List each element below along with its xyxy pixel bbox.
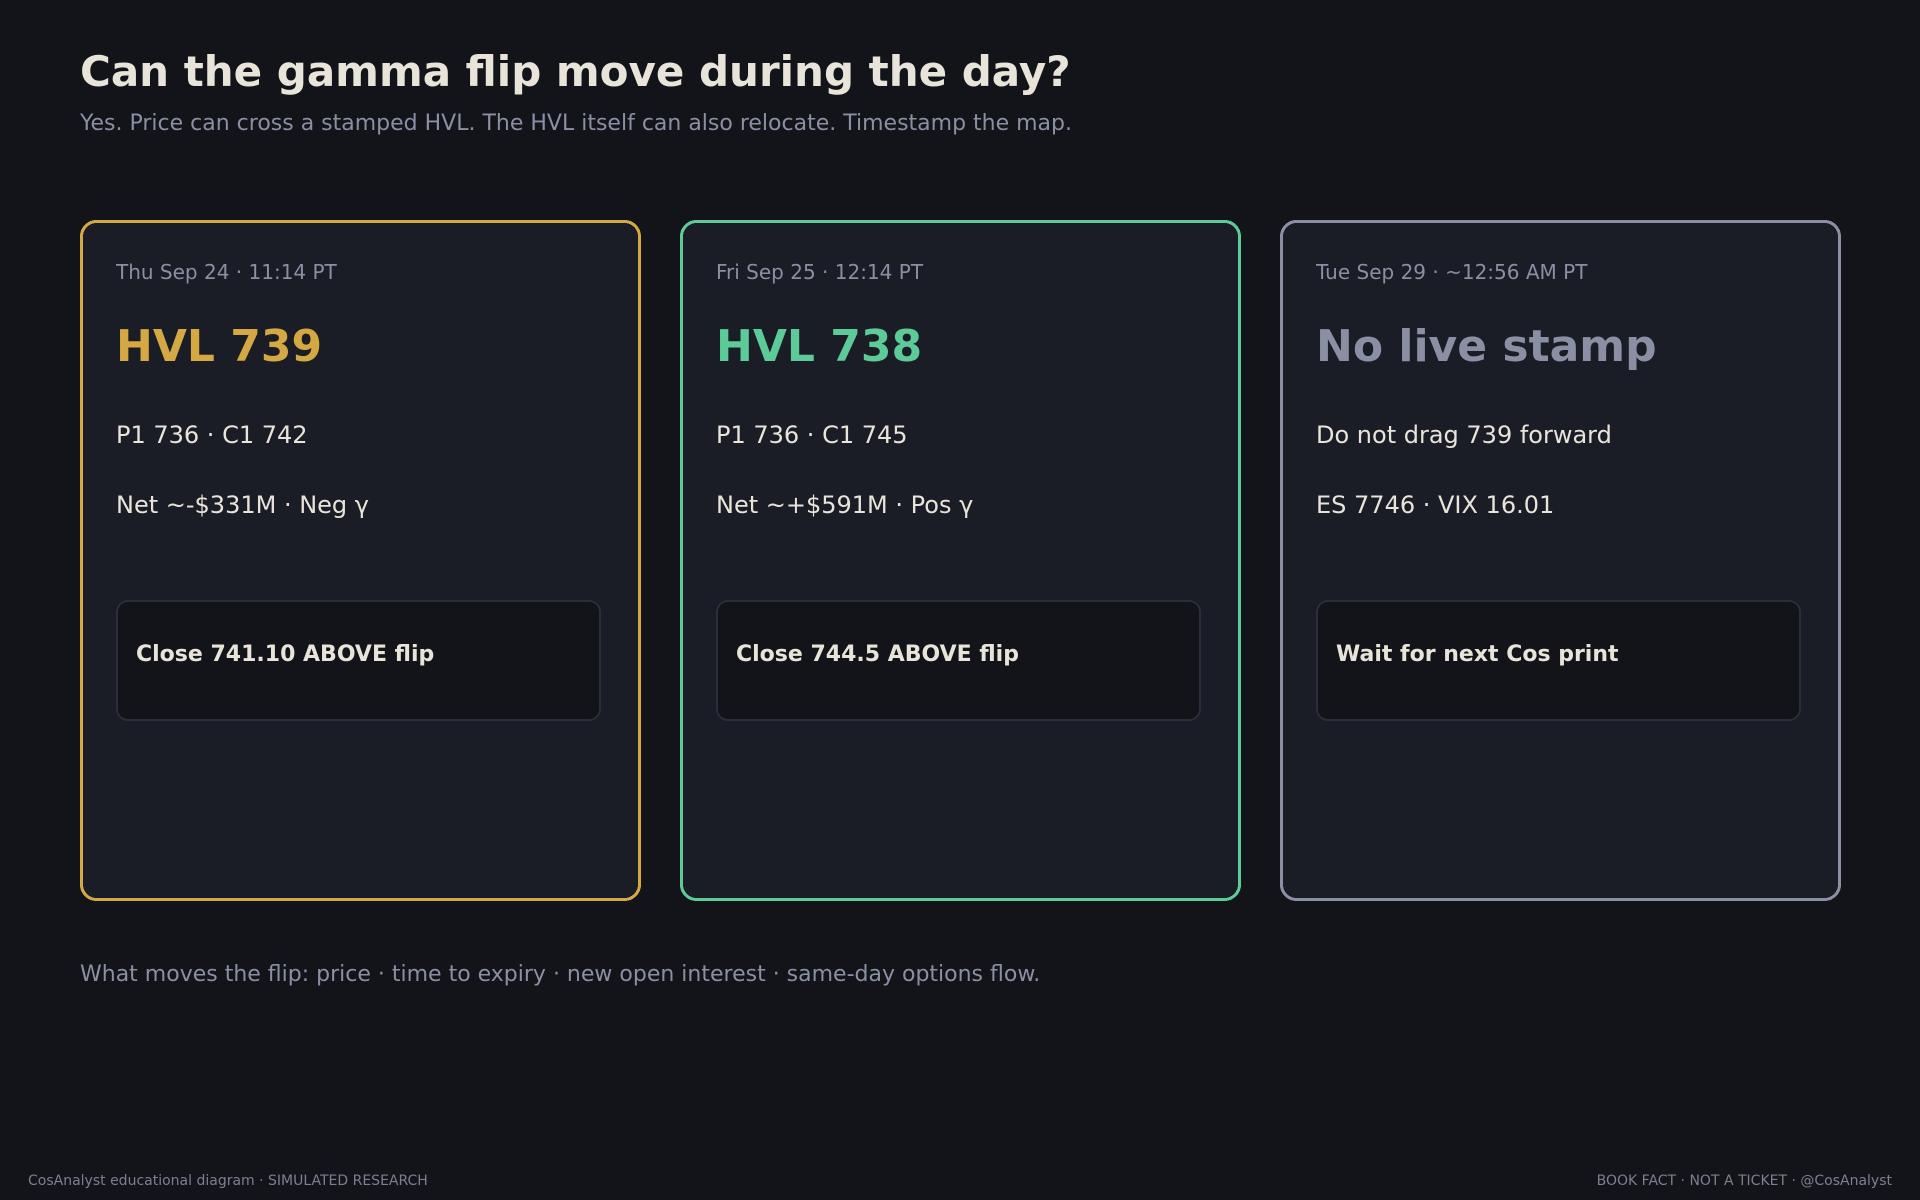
footer right: BOOK FACT · NOT A TICKET · @CosAnalyst xyxy=(1597,1173,1892,1189)
panel: Thu Sep 24 snapshot xyxy=(82,222,640,900)
net gamma: Net ~-$331M · Neg γ xyxy=(116,491,369,519)
callout: wait: Wait for next Cos print xyxy=(1336,642,1619,667)
callout: close xyxy=(117,601,600,720)
timestamp: Tue Sep 29 · ~12:56 AM PT xyxy=(1315,260,1588,284)
warning line: Do not drag 739 forward xyxy=(1316,421,1612,449)
callout: close xyxy=(717,601,1200,720)
HVL headline: HVL 739 xyxy=(116,321,322,372)
callout: wait xyxy=(1317,601,1800,720)
panel: Tue Sep 29 snapshot xyxy=(1282,222,1840,900)
callout: close: Close 741.10 ABOVE flip xyxy=(136,642,434,667)
timestamp: Fri Sep 25 · 12:14 PT xyxy=(716,260,924,284)
title: Can the gamma flip move during the day? xyxy=(80,47,1071,96)
headline: no live stamp: No live stamp xyxy=(1316,321,1657,372)
subtitle: Yes. Price can cross a stamped HVL. The HVL itself can also relocate. Timestamp the map. xyxy=(79,111,1072,136)
net gamma: Net ~+$591M · Pos γ xyxy=(716,491,973,519)
note: what moves the flip: What moves the flip: price · time to expiry · new open interest · same-day options flow. xyxy=(80,962,1040,987)
market levels: ES 7746 · VIX 16.01 xyxy=(1316,491,1554,519)
strikes: P1 736 · C1 745 xyxy=(716,421,908,449)
panel: Fri Sep 25 snapshot xyxy=(682,222,1240,900)
timestamp: Thu Sep 24 · 11:14 PT xyxy=(115,260,338,284)
HVL headline: HVL 738 xyxy=(716,321,922,372)
strikes: P1 736 · C1 742 xyxy=(116,421,308,449)
footer left: CosAnalyst educational diagram · SIMULATED RESEARCH xyxy=(28,1173,428,1189)
callout: close: Close 744.5 ABOVE flip xyxy=(736,642,1019,667)
